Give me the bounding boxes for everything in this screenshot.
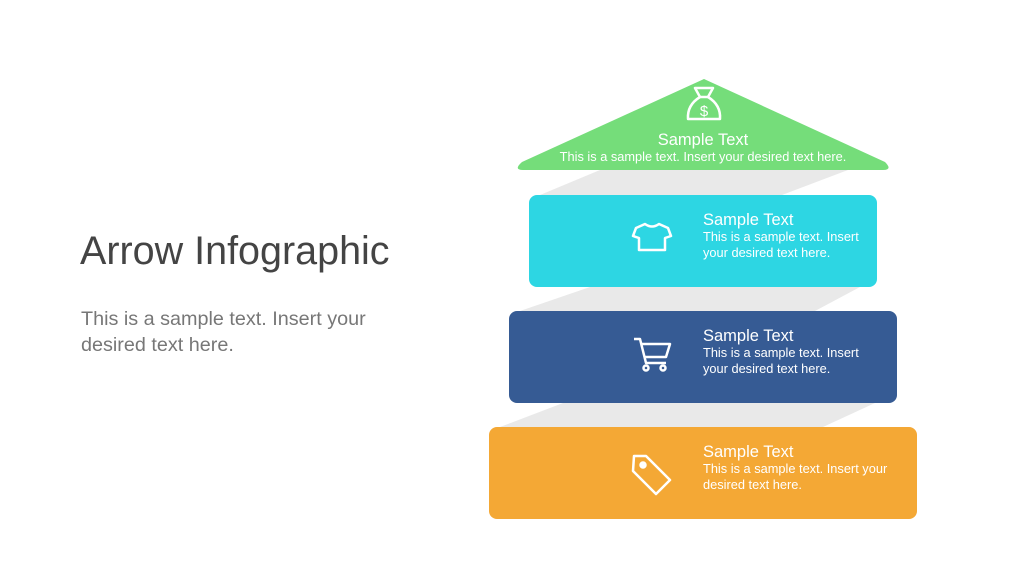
icon: money bag: $ <box>700 103 709 120</box>
text: cyan <box>703 211 859 260</box>
title: Arrow Infographic <box>80 229 390 273</box>
connectors <box>500 170 875 427</box>
boxes <box>489 195 917 519</box>
text: cyan: Sample Text <box>703 211 794 229</box>
icon: cart <box>634 339 670 370</box>
text: blue: Sample Text <box>703 327 794 345</box>
text: orange <box>703 443 888 492</box>
icon: t-shirt <box>633 224 671 250</box>
top triangle <box>518 79 889 170</box>
text: top: This is a sample text. Insert your desired text here. <box>560 149 846 164</box>
text: orange: This is a sample text. Insert your desired text here. <box>703 461 887 492</box>
subtitle text: This is a sample text. Insert your desired text here. <box>81 308 366 356</box>
icon: tag <box>633 456 670 494</box>
text: top: Sample Text <box>658 131 748 149</box>
text: blue <box>703 327 859 376</box>
text: orange: Sample Text <box>703 443 794 461</box>
icon: money bag <box>688 88 720 120</box>
text: top <box>560 131 846 164</box>
text: blue: This is a sample text. Insert your desired text here. <box>703 345 859 376</box>
text: cyan: This is a sample text. Insert your desired text here. <box>703 229 859 260</box>
